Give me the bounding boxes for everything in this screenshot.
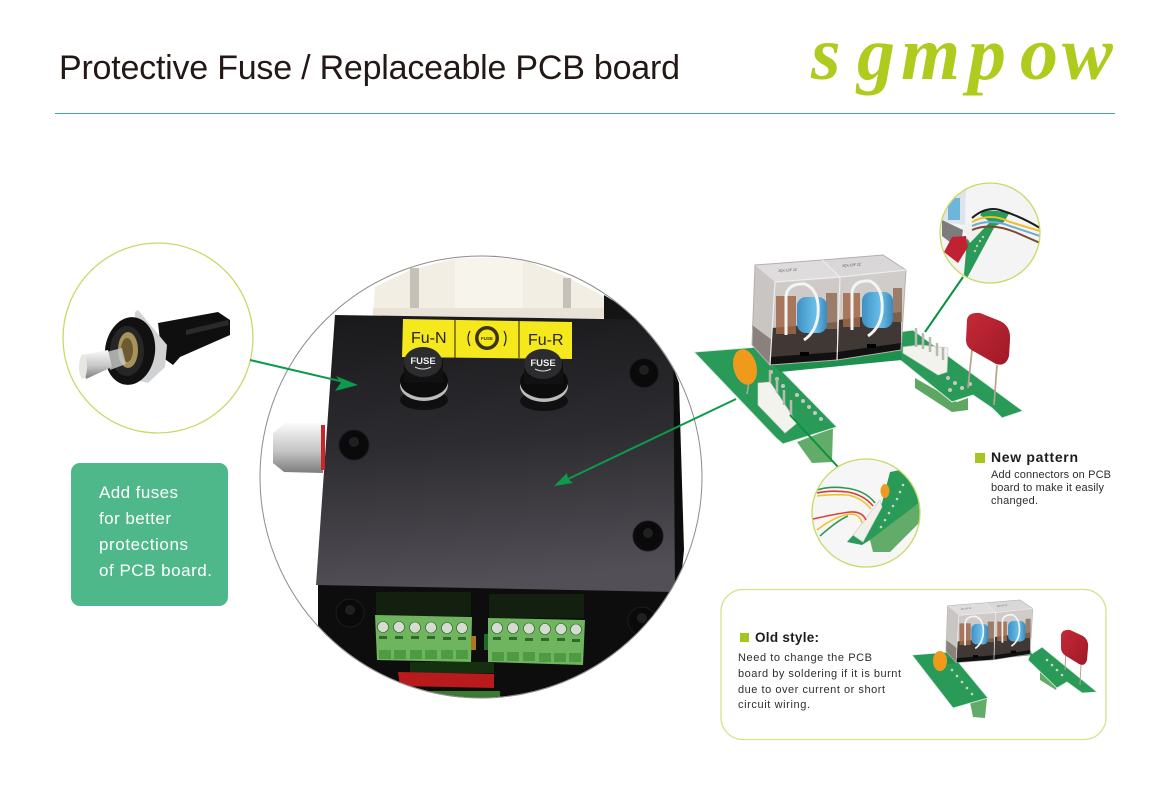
fuse label: FUSE [481, 336, 493, 341]
panel: add fuses callout: for better [99, 509, 171, 528]
fuse label [402, 319, 572, 359]
red terminal label [410, 662, 494, 673]
panel: fuse holder close-up circle [63, 243, 253, 433]
PCB left arm [694, 347, 837, 444]
panel: add fuses callout: Add fuses [99, 483, 178, 502]
text block: old style: due to over current or short [738, 684, 885, 696]
text block: old style: board by soldering if it is burnt [738, 668, 901, 680]
fuse cap: Fu-R: FUSE [530, 358, 556, 369]
fuse label: Fu-N [411, 330, 447, 347]
terminals under PCB [797, 428, 833, 463]
connector line to upper close-up [925, 277, 963, 332]
red capacitor [968, 350, 997, 405]
white connector: right [903, 345, 948, 375]
text block: old style: Need to change the PCB [738, 652, 872, 664]
panel: add fuses callout: of PCB board. [99, 561, 212, 580]
terminal block: left [376, 592, 471, 616]
fuse cap: Fu-N [400, 347, 448, 410]
terminal block: right [489, 594, 584, 618]
arrow: to PCB board [554, 399, 736, 486]
PCB right arm [898, 330, 1023, 418]
fuse cap: Fu-N: FUSE [410, 356, 436, 367]
fuse cap: Fu-R [520, 349, 568, 411]
logo: sgmpow: sgmpow [810, 12, 1113, 96]
title: Protective Fuse / Replaceable PCB board [59, 49, 680, 87]
text block: new pattern: changed. [991, 495, 1038, 507]
old style PCB [912, 600, 1097, 718]
text block: old style [738, 630, 901, 711]
fuse label: Fu-R [528, 332, 564, 349]
panel: new pattern PCB assembly [694, 255, 1023, 467]
text block: new pattern [975, 449, 1111, 507]
panel: main product circle [260, 256, 702, 700]
arrow: to fuse [250, 360, 358, 391]
lower close-up circle [812, 459, 920, 567]
solder pins [769, 370, 972, 421]
icon: fuse holder [79, 310, 230, 388]
text block: new pattern: New pattern [991, 449, 1078, 465]
varistor [747, 382, 749, 394]
text block: old style: circuit wiring. [738, 699, 810, 711]
screws [336, 358, 663, 635]
top plate [316, 315, 675, 592]
PCB middle strip [770, 350, 902, 372]
handle [273, 423, 323, 473]
text block: new pattern: Add connectors on PCB [991, 469, 1111, 481]
cream switch body [373, 258, 605, 320]
connector line to lower close-up [790, 415, 838, 467]
panel: old style [721, 590, 1106, 740]
panel: add fuses callout: protections [99, 535, 188, 554]
panel: add fuses callout [71, 463, 228, 606]
lower body [318, 585, 670, 698]
white connector: left [758, 382, 797, 433]
upper close-up circle [940, 183, 1040, 283]
text block: new pattern: board to make it easily [991, 482, 1104, 494]
text block: old style: Old style: [755, 630, 819, 645]
